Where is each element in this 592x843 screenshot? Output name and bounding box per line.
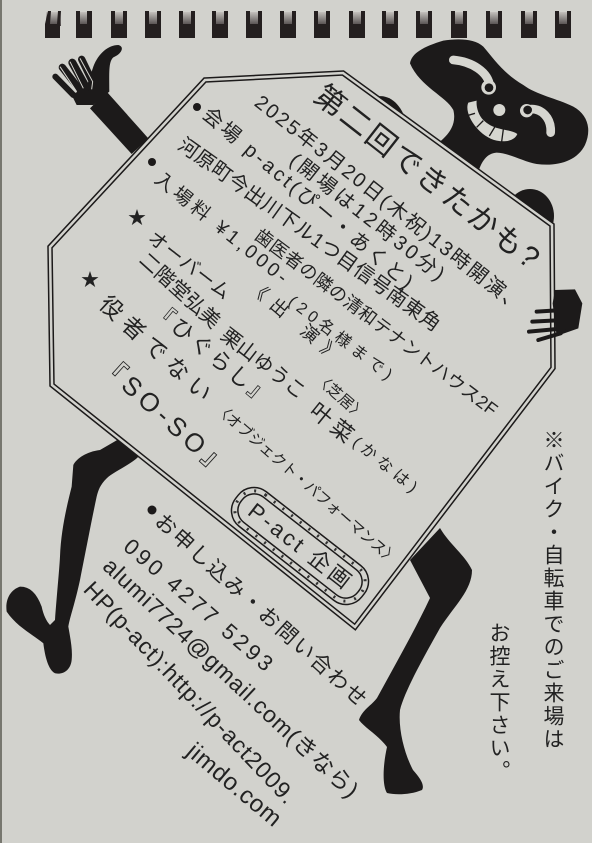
- date and time: 2025年3月20日(木祝)13時開演、: [250, 91, 527, 316]
- cast heading: 《出 演》: [246, 277, 343, 364]
- stamp: organiser: [223, 479, 377, 613]
- note: please refrain: お控え下さい。: [487, 622, 510, 783]
- performer: 栗山ゆうこ: [216, 324, 310, 404]
- icon: star: ★: [81, 270, 99, 290]
- performer: 役者でない: [94, 290, 217, 407]
- bullet: [148, 158, 156, 166]
- performer: オーバーム: [144, 228, 234, 304]
- genre: 〈オブジェクト・パフォーマンス〉: [211, 400, 401, 568]
- venue address: 河原町今出川下ル1つ目信号南東角: [174, 133, 445, 336]
- genre: 〈芝居〉: [311, 371, 369, 423]
- performer: 二階堂弘美: [135, 248, 225, 333]
- icon: star: ★: [128, 208, 146, 228]
- venue: 会場 p-act(ぴー・あくと): [198, 103, 417, 293]
- figure: shoulder blobs: [372, 96, 554, 243]
- admission fee: 入場料 ¥1,000-: [150, 168, 292, 288]
- bullet: [193, 103, 201, 111]
- figure: left arm and thumbs-up hand: [55, 45, 148, 154]
- left eye: [453, 60, 496, 95]
- figure: right hand gripping board: [529, 289, 582, 340]
- octagon signboard: [50, 73, 553, 627]
- contact heading: お申し込み・お問い合わせ: [150, 509, 371, 711]
- website: HP(p-act):http://p-act2009.: [79, 576, 301, 809]
- nose: [493, 104, 505, 116]
- email: alumi7724@gmail.com(きなら): [98, 552, 364, 803]
- bullet: [148, 506, 156, 514]
- phone number: 090 4277 5293: [119, 534, 278, 676]
- right eye: [520, 104, 551, 133]
- stamp: organiser: P-act 企画: [243, 498, 356, 593]
- performer: 叶菜(かなは): [305, 397, 423, 499]
- work title: 『SO-SO』: [93, 349, 235, 481]
- title: 第二回できたかも?: [308, 79, 545, 275]
- figure: left leg: [6, 439, 140, 674]
- door opening time: (開場は12時30分): [285, 149, 449, 285]
- grin: [466, 101, 517, 142]
- venue landmark: 歯医者の隣の清和テナントハウス2F: [251, 225, 501, 420]
- website continued: jimdo.com: [181, 737, 287, 832]
- capacity: (20名様まで): [285, 292, 396, 384]
- figure: right leg: [359, 528, 472, 794]
- work title: 『ひぐらし』: [147, 297, 276, 410]
- spiral binding: [45, 11, 571, 38]
- note: no bikes or bicycles: ※バイク・自転車でのご来場は: [541, 429, 564, 751]
- figure: head with grin: [410, 39, 588, 172]
